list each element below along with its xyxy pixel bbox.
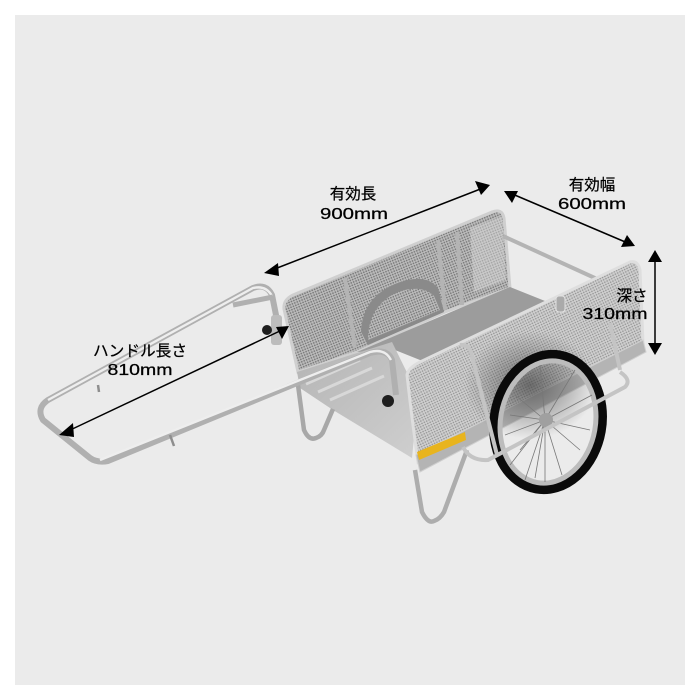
arrow: depth [648,250,662,355]
label: handle length: ハンドル長さ [93,342,187,360]
label: length: 900mm [320,206,388,223]
label: width: 有効幅 [569,176,615,194]
side guards and front bar [460,323,628,460]
label: depth: 深さ [616,287,648,305]
knob [262,325,272,335]
far rail [503,236,597,279]
arrow: length [264,181,490,276]
back mesh panel [284,211,510,372]
arrow: width [504,191,635,247]
label: length: 有効長 [330,185,376,203]
handle highlight [48,287,391,460]
right leg [415,450,467,522]
left leg [298,385,333,439]
right side mesh panel [407,262,646,472]
wheel [483,346,613,498]
handle tube [40,287,396,462]
label: handle length [93,342,187,379]
cart floor [297,287,560,458]
handle hinge [271,315,282,345]
label: width [558,176,626,213]
label: depth: 310mm [582,306,648,323]
label: handle length: 810mm [108,362,172,379]
arrow: handle length [59,326,289,437]
label: width: 600mm [558,196,626,213]
label: depth [582,287,648,323]
cart illustration [40,211,646,522]
handle brace [233,297,273,305]
warning label [417,432,466,460]
knob [382,395,394,407]
handle bolts [98,385,174,446]
label: length [320,185,388,223]
